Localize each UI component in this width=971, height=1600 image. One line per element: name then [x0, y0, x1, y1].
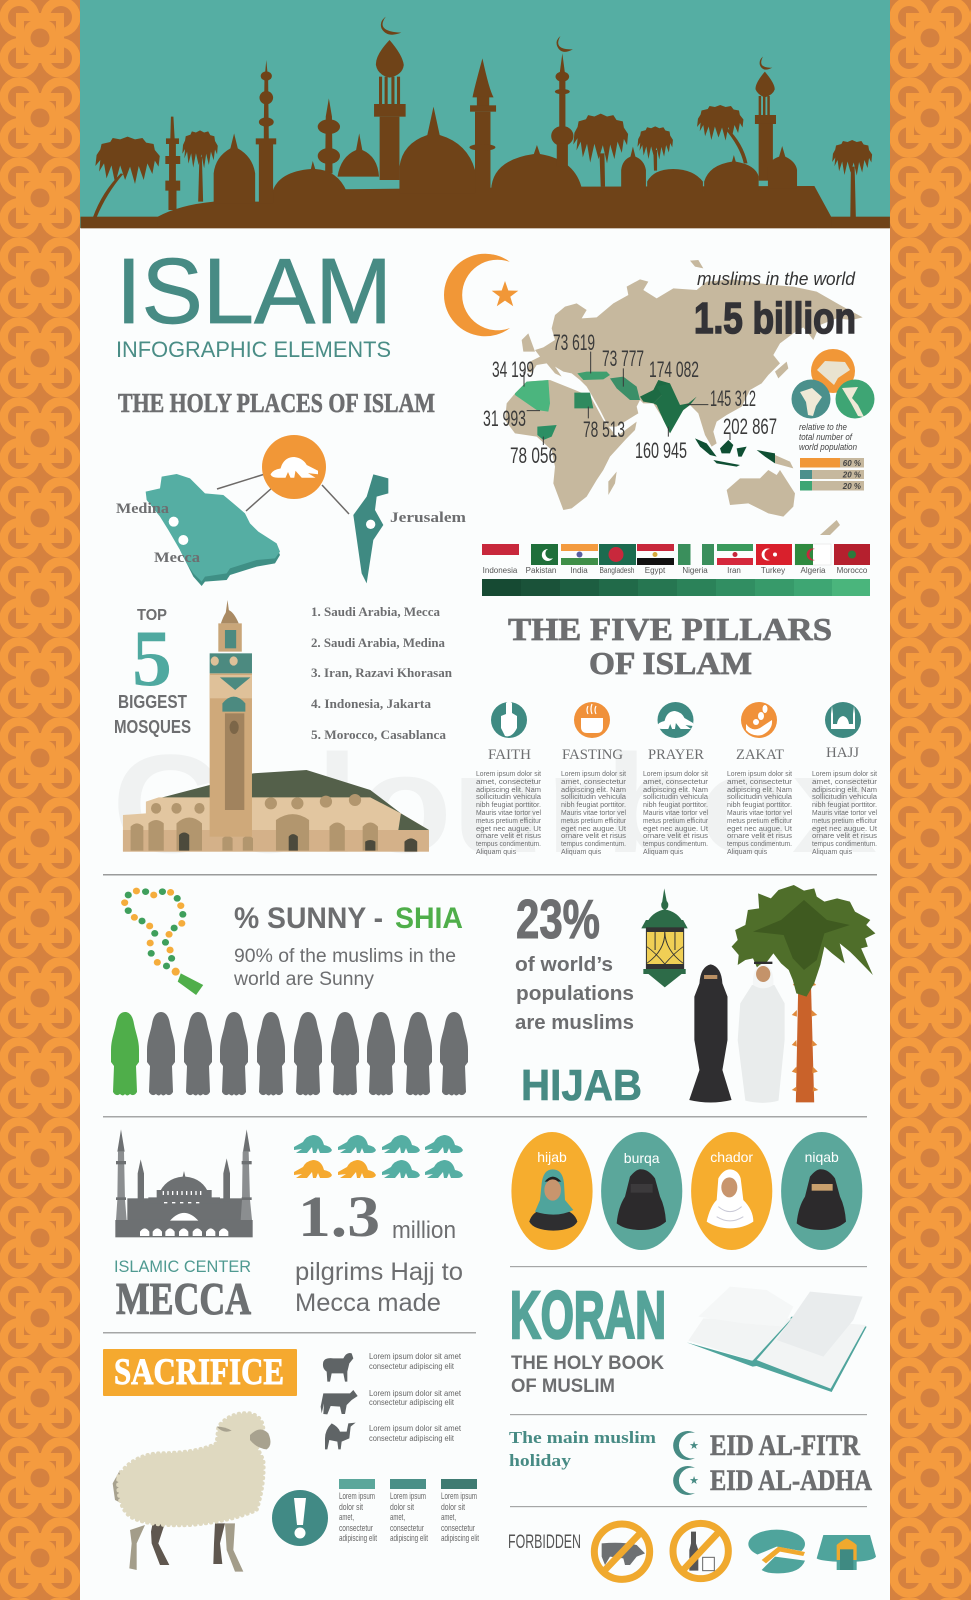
colour-coded notes: dolor sit — [339, 1502, 363, 1513]
oval: chador: chador — [710, 1149, 753, 1165]
colour-coded notes: adipiscing elit — [390, 1533, 428, 1544]
pillar body text: metus pretium efficitur — [561, 818, 627, 825]
pillar labels: FASTING — [562, 747, 624, 763]
colour-coded notes: Lorem ipsum — [441, 1491, 477, 1502]
title: ISLAM: ISLAM — [116, 239, 392, 343]
woman in black — [689, 964, 732, 1102]
icon: hajj — [825, 702, 861, 738]
heading: THE FIVE PILLARS — [508, 611, 832, 647]
country figures: 73 777 — [602, 346, 644, 371]
label: mecca: MECCA — [116, 1274, 251, 1324]
pillar body text: nibh feugiat porttitor. — [643, 802, 708, 809]
share bars — [800, 458, 864, 491]
text: 90 percent: 90% of the muslims in the — [234, 946, 456, 967]
flag labels — [483, 566, 868, 575]
man in white — [738, 962, 785, 1103]
icon: crescent 2: ★ — [689, 1475, 699, 1487]
panel: country flags — [482, 544, 870, 596]
pillar body text: Aliquam quis — [643, 849, 684, 856]
colour-coded notes: dolor sit — [390, 1502, 414, 1513]
panel: holidays — [509, 1428, 872, 1497]
flag labels: Bangladesh — [600, 566, 634, 575]
pillar body text: sollicitudin vehicula — [812, 794, 877, 801]
panel: five pillars — [476, 611, 878, 856]
colour-coded notes: amet, — [339, 1512, 354, 1523]
header: city skyline banner — [80, 0, 890, 228]
colour-coded notes: amet, — [390, 1512, 405, 1523]
pillar body text: sollicitudin vehicula — [727, 794, 792, 801]
colour-coded notes: Lorem ipsum — [390, 1491, 426, 1502]
panel: islamic center mecca — [114, 1129, 463, 1324]
text: biggest mosques: BIGGEST — [118, 692, 187, 712]
panel: world map — [483, 260, 874, 535]
icon: crescent 1: ★ — [689, 1440, 699, 1452]
stat: 1.3: 1.3 — [298, 1184, 380, 1249]
colour-coded notes: dolor sit — [441, 1502, 465, 1513]
oval: hijab: hijab — [537, 1149, 567, 1165]
colour-coded notes: adipiscing elit — [441, 1533, 479, 1544]
watermark: Colourbox — [112, 725, 877, 882]
country figures: 160 945 — [635, 438, 687, 463]
pictogram: ten veiled figures — [111, 1012, 468, 1096]
flag labels: Algeria — [801, 566, 826, 575]
heading: THE HOLY PLACES OF ISLAM — [118, 388, 435, 418]
connector lines — [217, 474, 349, 514]
country figures: 202 867 — [723, 414, 777, 439]
pillar body text: eget nec augue. Ut — [561, 826, 626, 833]
pillar body text: nibh feugiat porttitor. — [561, 802, 626, 809]
pillar body text: ornare velit et risus — [561, 833, 627, 840]
caption: relative share: world population — [799, 442, 857, 453]
pillar body text: Lorem ipsum dolor sit — [727, 771, 792, 778]
pillar body text: Mauris vitae tortor vel — [727, 810, 792, 817]
label: forbidden: FORBIDDEN — [508, 1532, 581, 1553]
pillar body text: adipiscing elit. Nam — [727, 787, 792, 794]
flag labels: India — [570, 566, 588, 575]
pillar body text: sollicitudin vehicula — [561, 794, 626, 801]
pillar body text: tempus condimentum. — [812, 841, 877, 848]
stat caption: of world’s — [515, 954, 613, 976]
text: eid al-adha: EID AL-ADHA — [710, 1464, 872, 1497]
text: holy book: OF MUSLIM — [511, 1376, 615, 1397]
panel: forbidden — [508, 1523, 876, 1579]
heading: koran: KORAN — [510, 1278, 666, 1353]
heading: shia: SHIA — [395, 902, 463, 935]
pillar body text: metus pretium efficitur — [727, 818, 793, 825]
text: TOP: TOP — [137, 607, 167, 624]
animal captions: Lorem ipsum dolor sit amet — [369, 1389, 462, 1398]
flag labels: Iran — [727, 566, 741, 575]
pillar body text: tempus condimentum. — [727, 841, 792, 848]
big number: 1.5 billion: 1.5 billion — [694, 294, 856, 343]
icon: crescent 1 — [673, 1431, 699, 1460]
pillar body text: Mauris vitae tortor vel — [643, 810, 708, 817]
flag labels: Morocco — [837, 566, 868, 575]
caption: relative share: total number of — [799, 432, 853, 443]
pillar body text: Aliquam quis — [561, 849, 602, 856]
panel: koran — [510, 1278, 867, 1397]
colour-coded notes — [339, 1479, 479, 1544]
pillar body text: eget nec augue. Ut — [727, 826, 792, 833]
country figures: 174 082 — [649, 357, 699, 382]
country figures: 78 056 — [510, 443, 557, 468]
skyline silhouette — [81, 17, 890, 228]
icon: prayer — [657, 702, 694, 738]
pillar body text — [476, 771, 878, 856]
pillar body text: amet, consectetur — [812, 779, 878, 786]
animal captions: consectetur adipiscing elit — [369, 1362, 455, 1371]
pillar body text: amet, consectetur — [561, 779, 627, 786]
ranked list: 5. Morocco, Casablanca — [311, 728, 447, 742]
icon: crescent 2 — [673, 1466, 699, 1495]
pillar body text: sollicitudin vehicula — [643, 794, 708, 801]
pillar body text: nibh feugiat porttitor. — [476, 802, 541, 809]
panel: hijab types — [511, 1132, 862, 1250]
pillar body text: metus pretium efficitur — [643, 818, 709, 825]
icon: three continent circles — [792, 349, 874, 418]
pillar body text: Lorem ipsum dolor sit — [476, 771, 541, 778]
colour-coded notes: consectetur — [339, 1523, 373, 1534]
country figures: 73 619 — [553, 330, 595, 355]
country figures: 31 993 — [483, 406, 526, 431]
oval: burqa — [601, 1132, 682, 1250]
icon: no alcohol — [673, 1523, 728, 1579]
caption: relative share — [799, 422, 857, 453]
pillar body text: Mauris vitae tortor vel — [476, 810, 541, 817]
pillar body text: adipiscing elit. Nam — [476, 787, 541, 794]
pillar body text: adipiscing elit. Nam — [561, 787, 626, 794]
flag labels: Egypt — [645, 566, 666, 575]
pillar body text: metus pretium efficitur — [812, 818, 878, 825]
map: Jerusalem region — [353, 474, 388, 583]
text: 90 percent: world are Sunny — [233, 969, 375, 990]
ranked list — [311, 605, 452, 742]
ranked list: 1. Saudi Arabia, Mecca — [311, 605, 441, 619]
pillar body text: eget nec augue. Ut — [476, 826, 541, 833]
pillar body text: Mauris vitae tortor vel — [561, 810, 626, 817]
oval: niqab — [781, 1132, 862, 1250]
text: pilgrims — [295, 1258, 463, 1317]
illustration: Hassan II mosque — [123, 600, 429, 852]
pillar body text: ornare velit et risus — [643, 833, 709, 840]
text: main holiday: holiday — [509, 1451, 572, 1470]
icon: prayer beads — [121, 888, 203, 995]
subtitle: INFOGRAPHIC ELEMENTS — [116, 337, 391, 362]
pillar body text: amet, consectetur — [643, 779, 709, 786]
ranked list: 4. Indonesia, Jakarta — [311, 697, 432, 711]
text: 90 percent — [233, 946, 456, 990]
colour-coded notes: consectetur — [390, 1523, 424, 1534]
pillar body text: ornare velit et risus — [476, 833, 542, 840]
pillar body text: nibh feugiat porttitor. — [812, 802, 877, 809]
panel: title — [116, 239, 392, 362]
icon: fasting — [574, 702, 610, 738]
share bars: 60 % — [843, 459, 861, 468]
country figures: 34 199 — [492, 357, 534, 382]
label: Mecca: Mecca — [154, 550, 201, 566]
share bars: 20 % — [842, 470, 861, 480]
colour-coded notes: Lorem ipsum — [339, 1491, 375, 1502]
animal captions: Lorem ipsum dolor sit amet — [369, 1352, 462, 1361]
pillar body text: Mauris vitae tortor vel — [812, 810, 877, 817]
heading: hijab: HIJAB — [521, 1061, 642, 1110]
pillar body text: Aliquam quis — [476, 849, 517, 856]
green scale bar — [482, 579, 870, 596]
caption: muslims in the world: muslims in the world — [697, 269, 856, 289]
pillar body text: eget nec augue. Ut — [643, 826, 708, 833]
country figures — [483, 330, 777, 468]
pillar labels: ZAKAT — [736, 747, 784, 763]
icon: crescent and star — [444, 254, 518, 336]
oval: chador — [691, 1132, 772, 1250]
map: world continents — [505, 260, 863, 535]
flag labels: Nigeria — [682, 566, 708, 575]
animal captions: consectetur adipiscing elit — [369, 1398, 455, 1407]
colour-coded notes: consectetur — [441, 1523, 475, 1534]
palm trees — [93, 173, 123, 217]
icon: exclamation mark — [272, 1490, 328, 1546]
pillar body text: eget nec augue. Ut — [812, 826, 877, 833]
oval: burqa: burqa — [624, 1150, 660, 1166]
icon: mosque silhouette — [115, 1129, 253, 1237]
country figures: 145 312 — [710, 386, 756, 411]
icon: praying person in orange circle — [262, 435, 326, 499]
text: main holiday: The main muslim — [509, 1428, 656, 1447]
pillar body text: adipiscing elit. Nam — [812, 787, 877, 794]
animal captions: consectetur adipiscing elit — [369, 1434, 455, 1443]
number 5: 5 — [132, 615, 172, 703]
share bars: 20 % — [842, 482, 861, 491]
pillar body text: tempus condimentum. — [561, 841, 626, 848]
pillar body text: Aliquam quis — [812, 849, 853, 856]
panel: world population and hijab — [515, 885, 875, 1110]
pillar labels — [488, 745, 859, 763]
text: holy book: THE HOLY BOOK — [511, 1353, 664, 1374]
pictogram: praying pilgrims — [294, 1135, 463, 1178]
icon: faith — [491, 702, 527, 738]
oval: hijab — [511, 1132, 593, 1250]
pillar labels: PRAYER — [648, 747, 704, 763]
heading: OF ISLAM — [589, 645, 752, 681]
label: Jerusalem: Jerusalem — [390, 510, 467, 526]
heading — [508, 611, 832, 681]
left ornamental border — [0, 0, 80, 1600]
country figures: 78 513 — [583, 417, 625, 442]
illustration: open book — [687, 1287, 867, 1392]
pillar labels: HAJJ — [826, 745, 859, 761]
pillar body text: ornare velit et risus — [812, 833, 878, 840]
text: holy book — [511, 1353, 664, 1397]
oval: niqab: niqab — [805, 1149, 839, 1165]
caption: relative share: relative to the — [799, 422, 847, 433]
illustration: woman, man and palm — [689, 885, 875, 1103]
colour-coded notes: adipiscing elit — [339, 1533, 377, 1544]
icon: hat one — [748, 1530, 805, 1575]
pillar labels: FAITH — [488, 747, 532, 763]
ranked list: 3. Iran, Razavi Khorasan — [311, 666, 452, 680]
flags row — [482, 544, 870, 565]
text: biggest mosques: MOSQUES — [114, 717, 191, 737]
ranked list: 2. Saudi Arabia, Medina — [311, 636, 446, 650]
animal captions: Lorem ipsum dolor sit amet — [369, 1424, 462, 1433]
pillar body text: tempus condimentum. — [476, 841, 541, 848]
flag labels: Pakistan — [526, 566, 556, 575]
panel: sacrifice — [103, 1349, 479, 1572]
text: pilgrims: pilgrims Hajj to — [295, 1258, 463, 1286]
flag labels: Turkey — [761, 566, 785, 575]
text: main holiday — [509, 1428, 656, 1470]
icon: no pork — [594, 1524, 650, 1579]
pillar body text: Lorem ipsum dolor sit — [812, 771, 877, 778]
pillar body text: tempus condimentum. — [643, 841, 708, 848]
pillar body text: Lorem ipsum dolor sit — [561, 771, 626, 778]
stat: million: million — [392, 1217, 456, 1244]
stat caption: are muslims — [515, 1012, 634, 1034]
text: biggest mosques — [114, 692, 191, 737]
pillar body text: Aliquam quis — [727, 849, 768, 856]
stat caption: populations — [516, 983, 634, 1005]
pillar body text: adipiscing elit. Nam — [643, 787, 708, 794]
icon: zakat — [741, 702, 777, 738]
label: islamic center: ISLAMIC CENTER — [114, 1258, 251, 1276]
pillar body text: amet, consectetur — [476, 779, 542, 786]
icon: hat two — [817, 1535, 876, 1570]
right ornamental border — [890, 0, 971, 1600]
illustration: sheep — [113, 1413, 270, 1572]
panel: sunny and shia — [111, 888, 468, 1096]
flag labels: Indonesia — [483, 566, 518, 575]
pillar body text: Lorem ipsum dolor sit — [643, 771, 708, 778]
pillar body text: amet, consectetur — [727, 779, 793, 786]
pillar body text: ornare velit et risus — [727, 833, 793, 840]
colour-coded notes: amet, — [441, 1512, 456, 1523]
heading: sunny: % SUNNY - — [234, 902, 383, 935]
map: Saudi Arabia — [146, 474, 280, 586]
text: eid al-fitr: EID AL-FITR — [710, 1429, 860, 1462]
text: pilgrims: Mecca made — [295, 1289, 441, 1317]
label: Medina: Medina — [116, 501, 170, 517]
icon: lantern — [641, 888, 688, 987]
banner: sacrifice: SACRIFICE — [114, 1352, 284, 1393]
stat caption — [515, 954, 634, 1034]
pillar body text: nibh feugiat porttitor. — [727, 802, 792, 809]
stat: 23 percent: 23% — [516, 888, 600, 950]
palm tree — [732, 885, 875, 1102]
animal captions — [369, 1352, 462, 1443]
panel: holy places — [116, 388, 467, 586]
icons: sheep, cow, camel — [321, 1353, 358, 1449]
highlighted muslim countries — [515, 380, 550, 412]
pillar body text: sollicitudin vehicula — [476, 794, 541, 801]
panel: top 5 biggest mosques — [114, 600, 452, 852]
pillar body text: metus pretium efficitur — [476, 818, 542, 825]
